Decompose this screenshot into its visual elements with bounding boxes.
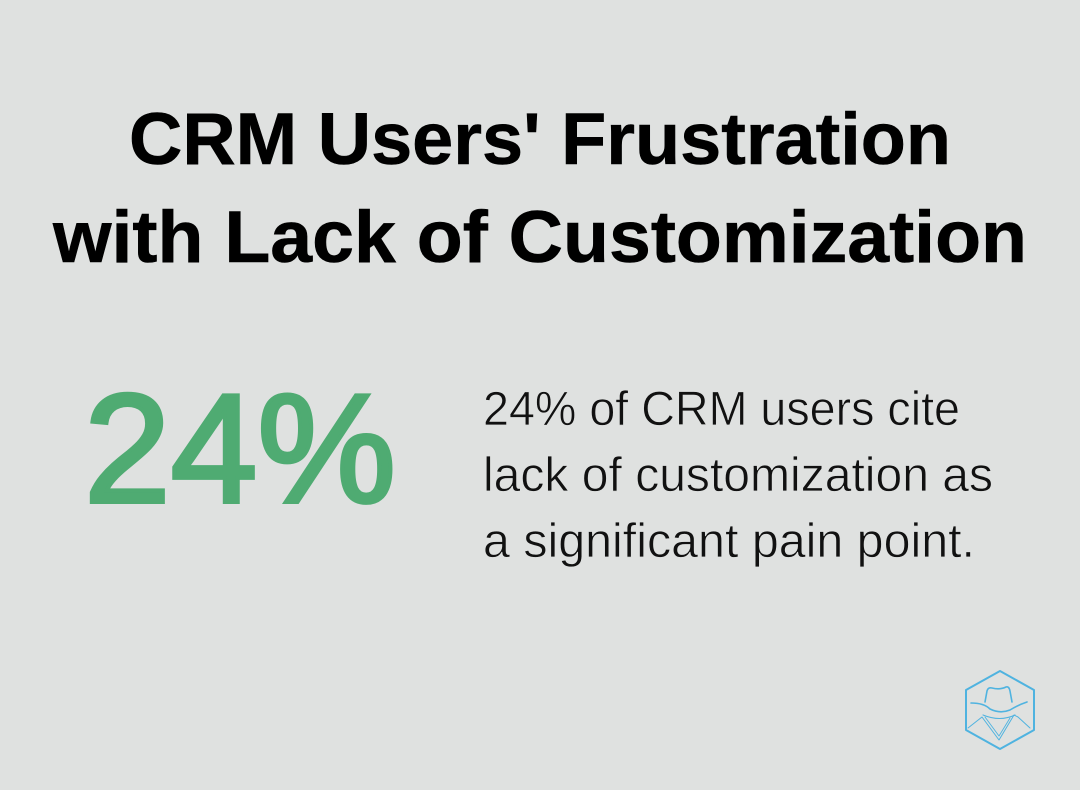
- title: CRM Users' Frustration: [129, 99, 951, 180]
- description text: [483, 383, 993, 568]
- description text: 24% of CRM users cite: [483, 383, 960, 436]
- description text: lack of customization as: [483, 449, 993, 502]
- title: [52, 99, 1027, 278]
- icon: hexagon logo with hat-wearing spy: [966, 671, 1034, 749]
- big statistic: 24%: 24%: [84, 362, 396, 535]
- description text: a significant pain point.: [483, 515, 975, 568]
- title: with Lack of Customization: [52, 197, 1027, 278]
